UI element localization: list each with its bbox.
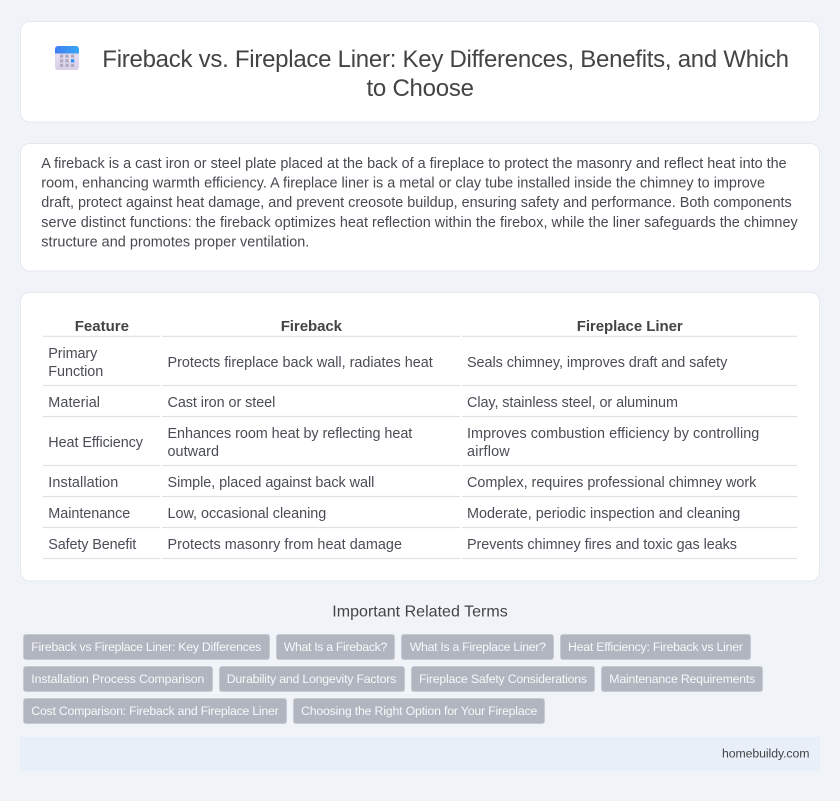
table row: heat efficiency: Improves combustion efficiency by controlling — [467, 426, 759, 442]
table row: maintenance: Moderate, periodic inspection and cleaning — [467, 506, 740, 522]
table row: installation — [43, 475, 797, 496]
tag — [602, 666, 762, 692]
footer — [20, 737, 820, 771]
tag: Fireplace Safety Considerations — [419, 672, 587, 686]
table row: heat efficiency: airflow — [467, 444, 510, 460]
tag: Installation Process Comparison — [31, 672, 204, 686]
table row: maintenance: Low, occasional cleaning — [168, 506, 326, 522]
text block: description paragraph: serve distinct functions: the fireback optimizes heat reflection within the firebox, while the liner safeguards the chimney — [41, 215, 798, 231]
table row: material: Cast iron or steel — [168, 395, 275, 411]
table row: heat efficiency: Enhances room heat by reflecting heat — [168, 426, 412, 442]
footer: homebuildy.com — [722, 747, 810, 761]
table row: safety benefit: Protects masonry from heat damage — [168, 537, 402, 553]
table header row: Feature — [75, 318, 129, 335]
table row: installation: Complex, requires professional chimney work — [467, 475, 757, 491]
table row: material: Material — [48, 395, 100, 411]
table row: material — [43, 395, 797, 416]
table row: installation: Installation — [48, 475, 118, 491]
tag: Cost Comparison: Fireback and Fireplace Liner — [31, 704, 279, 718]
tag — [24, 666, 212, 692]
table row: primary function: Protects fireplace back wall, radiates heat — [168, 355, 433, 371]
panel: description — [20, 144, 820, 271]
tag — [560, 634, 750, 660]
table row: primary function — [43, 346, 797, 386]
table header row — [43, 318, 797, 336]
tag: Fireback vs Fireplace Liner: Key Differences — [31, 640, 261, 654]
table row: heat efficiency: outward — [168, 444, 219, 460]
text block: description paragraph — [41, 156, 798, 250]
tag — [412, 666, 594, 692]
panel: related term tags — [24, 634, 762, 724]
tag — [402, 634, 554, 660]
table row: heat efficiency: Heat Efficiency — [48, 435, 144, 451]
tag: Durability and Longevity Factors — [227, 672, 396, 686]
title: to Choose — [366, 75, 474, 102]
table row: primary function: Function — [48, 364, 103, 380]
tag — [220, 666, 404, 692]
table row: maintenance — [43, 506, 797, 528]
tag — [294, 698, 544, 724]
table row: primary function: Seals chimney, improves draft and safety — [467, 355, 728, 371]
table header row: Fireback — [281, 318, 343, 335]
table row: safety benefit — [43, 537, 797, 558]
text block: description paragraph: room, enhancing warmth efficiency. A fireplace liner is a metal or clay tube installed inside the chimney to improve — [41, 176, 765, 192]
table header row: Fireplace Liner — [577, 318, 683, 335]
tag — [276, 634, 394, 660]
tag: What Is a Fireback? — [284, 640, 387, 654]
table row: safety benefit: Prevents chimney fires and toxic gas leaks — [467, 537, 737, 553]
table row: installation: Simple, placed against back wall — [168, 475, 374, 491]
table row: maintenance: Maintenance — [48, 506, 130, 522]
text block: description paragraph: A fireback is a cast iron or steel plate placed at the back of a fireplace to protect the masonry and reflect heat into the — [41, 156, 787, 172]
tag — [24, 698, 286, 724]
title — [102, 46, 789, 102]
table row: primary function: Primary — [48, 346, 98, 362]
tag: Choosing the Right Option for Your Fireplace — [301, 704, 537, 718]
panel: comparison table — [20, 292, 820, 581]
title: Fireback vs. Fireplace Liner: Key Differences, Benefits, and Which — [102, 46, 789, 73]
table row: material: Clay, stainless steel, or aluminum — [467, 395, 678, 411]
tag: What Is a Fireplace Liner? — [410, 640, 546, 654]
panel: title header — [20, 22, 820, 122]
table row: heat efficiency — [43, 426, 797, 466]
tag — [24, 634, 270, 660]
text block: description paragraph: draft, protect against heat damage, and prevent creosote buildup, ensuring safety and performance. Both components — [41, 195, 792, 211]
icon: calendar — [55, 46, 79, 70]
heading: important related terms: Important Related Terms — [332, 604, 508, 621]
text block: description paragraph: structure and promotes proper ventilation. — [41, 234, 309, 250]
tag: Maintenance Requirements — [609, 672, 755, 686]
tag: Heat Efficiency: Fireback vs Liner — [568, 640, 743, 654]
table row: safety benefit: Safety Benefit — [48, 537, 136, 553]
